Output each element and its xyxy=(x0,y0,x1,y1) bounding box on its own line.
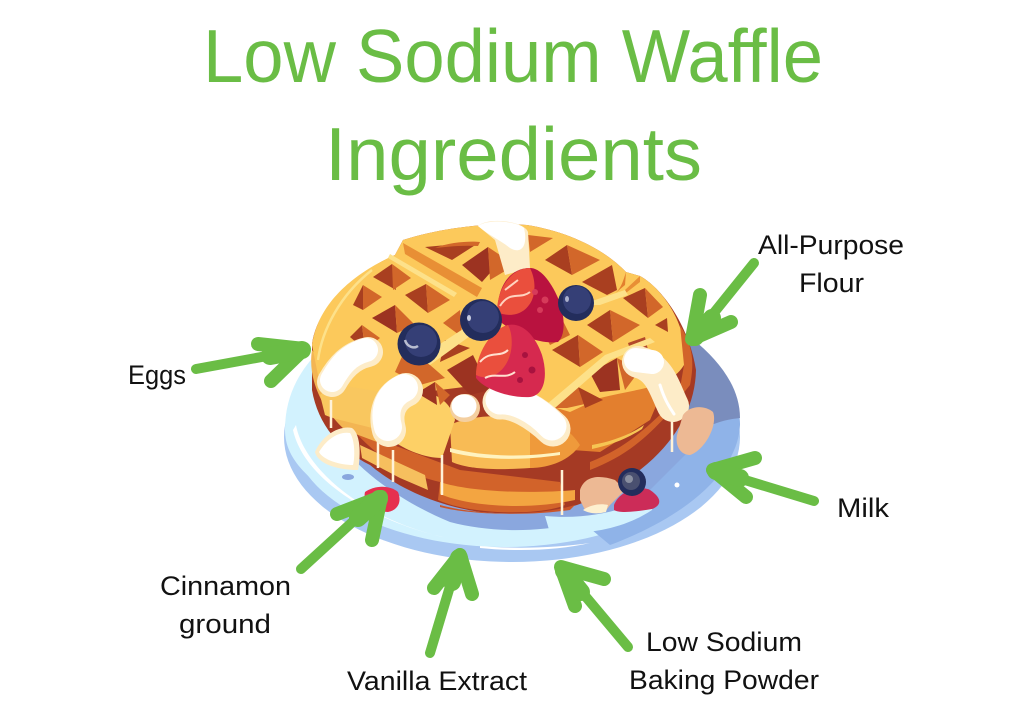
label: low sodium baking powder xyxy=(629,627,819,695)
arrow: eggs xyxy=(196,344,305,381)
arrow: low sodium baking powder xyxy=(560,566,628,647)
arrow: cinnamon ground xyxy=(301,495,382,569)
arrow: all-purpose flour xyxy=(692,263,754,340)
waffle pockets xyxy=(350,235,668,408)
label: all-purpose flour xyxy=(758,230,904,298)
label: cinnamon ground: ground xyxy=(179,609,271,639)
waffle illustration xyxy=(284,221,740,562)
waffle highlights xyxy=(420,305,506,365)
title: Low Sodium Waffle xyxy=(203,14,823,98)
label: all-purpose flour: All-Purpose xyxy=(758,230,904,260)
drips xyxy=(331,400,672,515)
title xyxy=(203,14,823,196)
blueberries xyxy=(398,285,594,366)
label: vanilla extract: Vanilla Extract xyxy=(347,666,528,696)
waffle top grid xyxy=(312,224,685,412)
waffle stack xyxy=(311,224,696,515)
label: eggs: Eggs xyxy=(128,360,186,390)
label: milk: Milk xyxy=(837,493,890,523)
cream topping xyxy=(315,221,674,470)
label: all-purpose flour: Flour xyxy=(799,268,864,298)
strawberry: front xyxy=(476,325,545,397)
arrow: vanilla extract xyxy=(430,553,472,653)
label: low sodium baking powder: Low Sodium xyxy=(646,627,802,657)
title: Ingredients xyxy=(325,112,702,196)
side fruit and cream on plate xyxy=(365,407,714,513)
strawberry: top xyxy=(497,268,564,342)
label: cinnamon ground: Cinnamon xyxy=(160,571,291,601)
plate xyxy=(284,300,740,562)
label: low sodium baking powder: Baking Powder xyxy=(629,665,819,695)
arrow: milk xyxy=(712,458,814,501)
label: cinnamon ground xyxy=(160,571,291,639)
